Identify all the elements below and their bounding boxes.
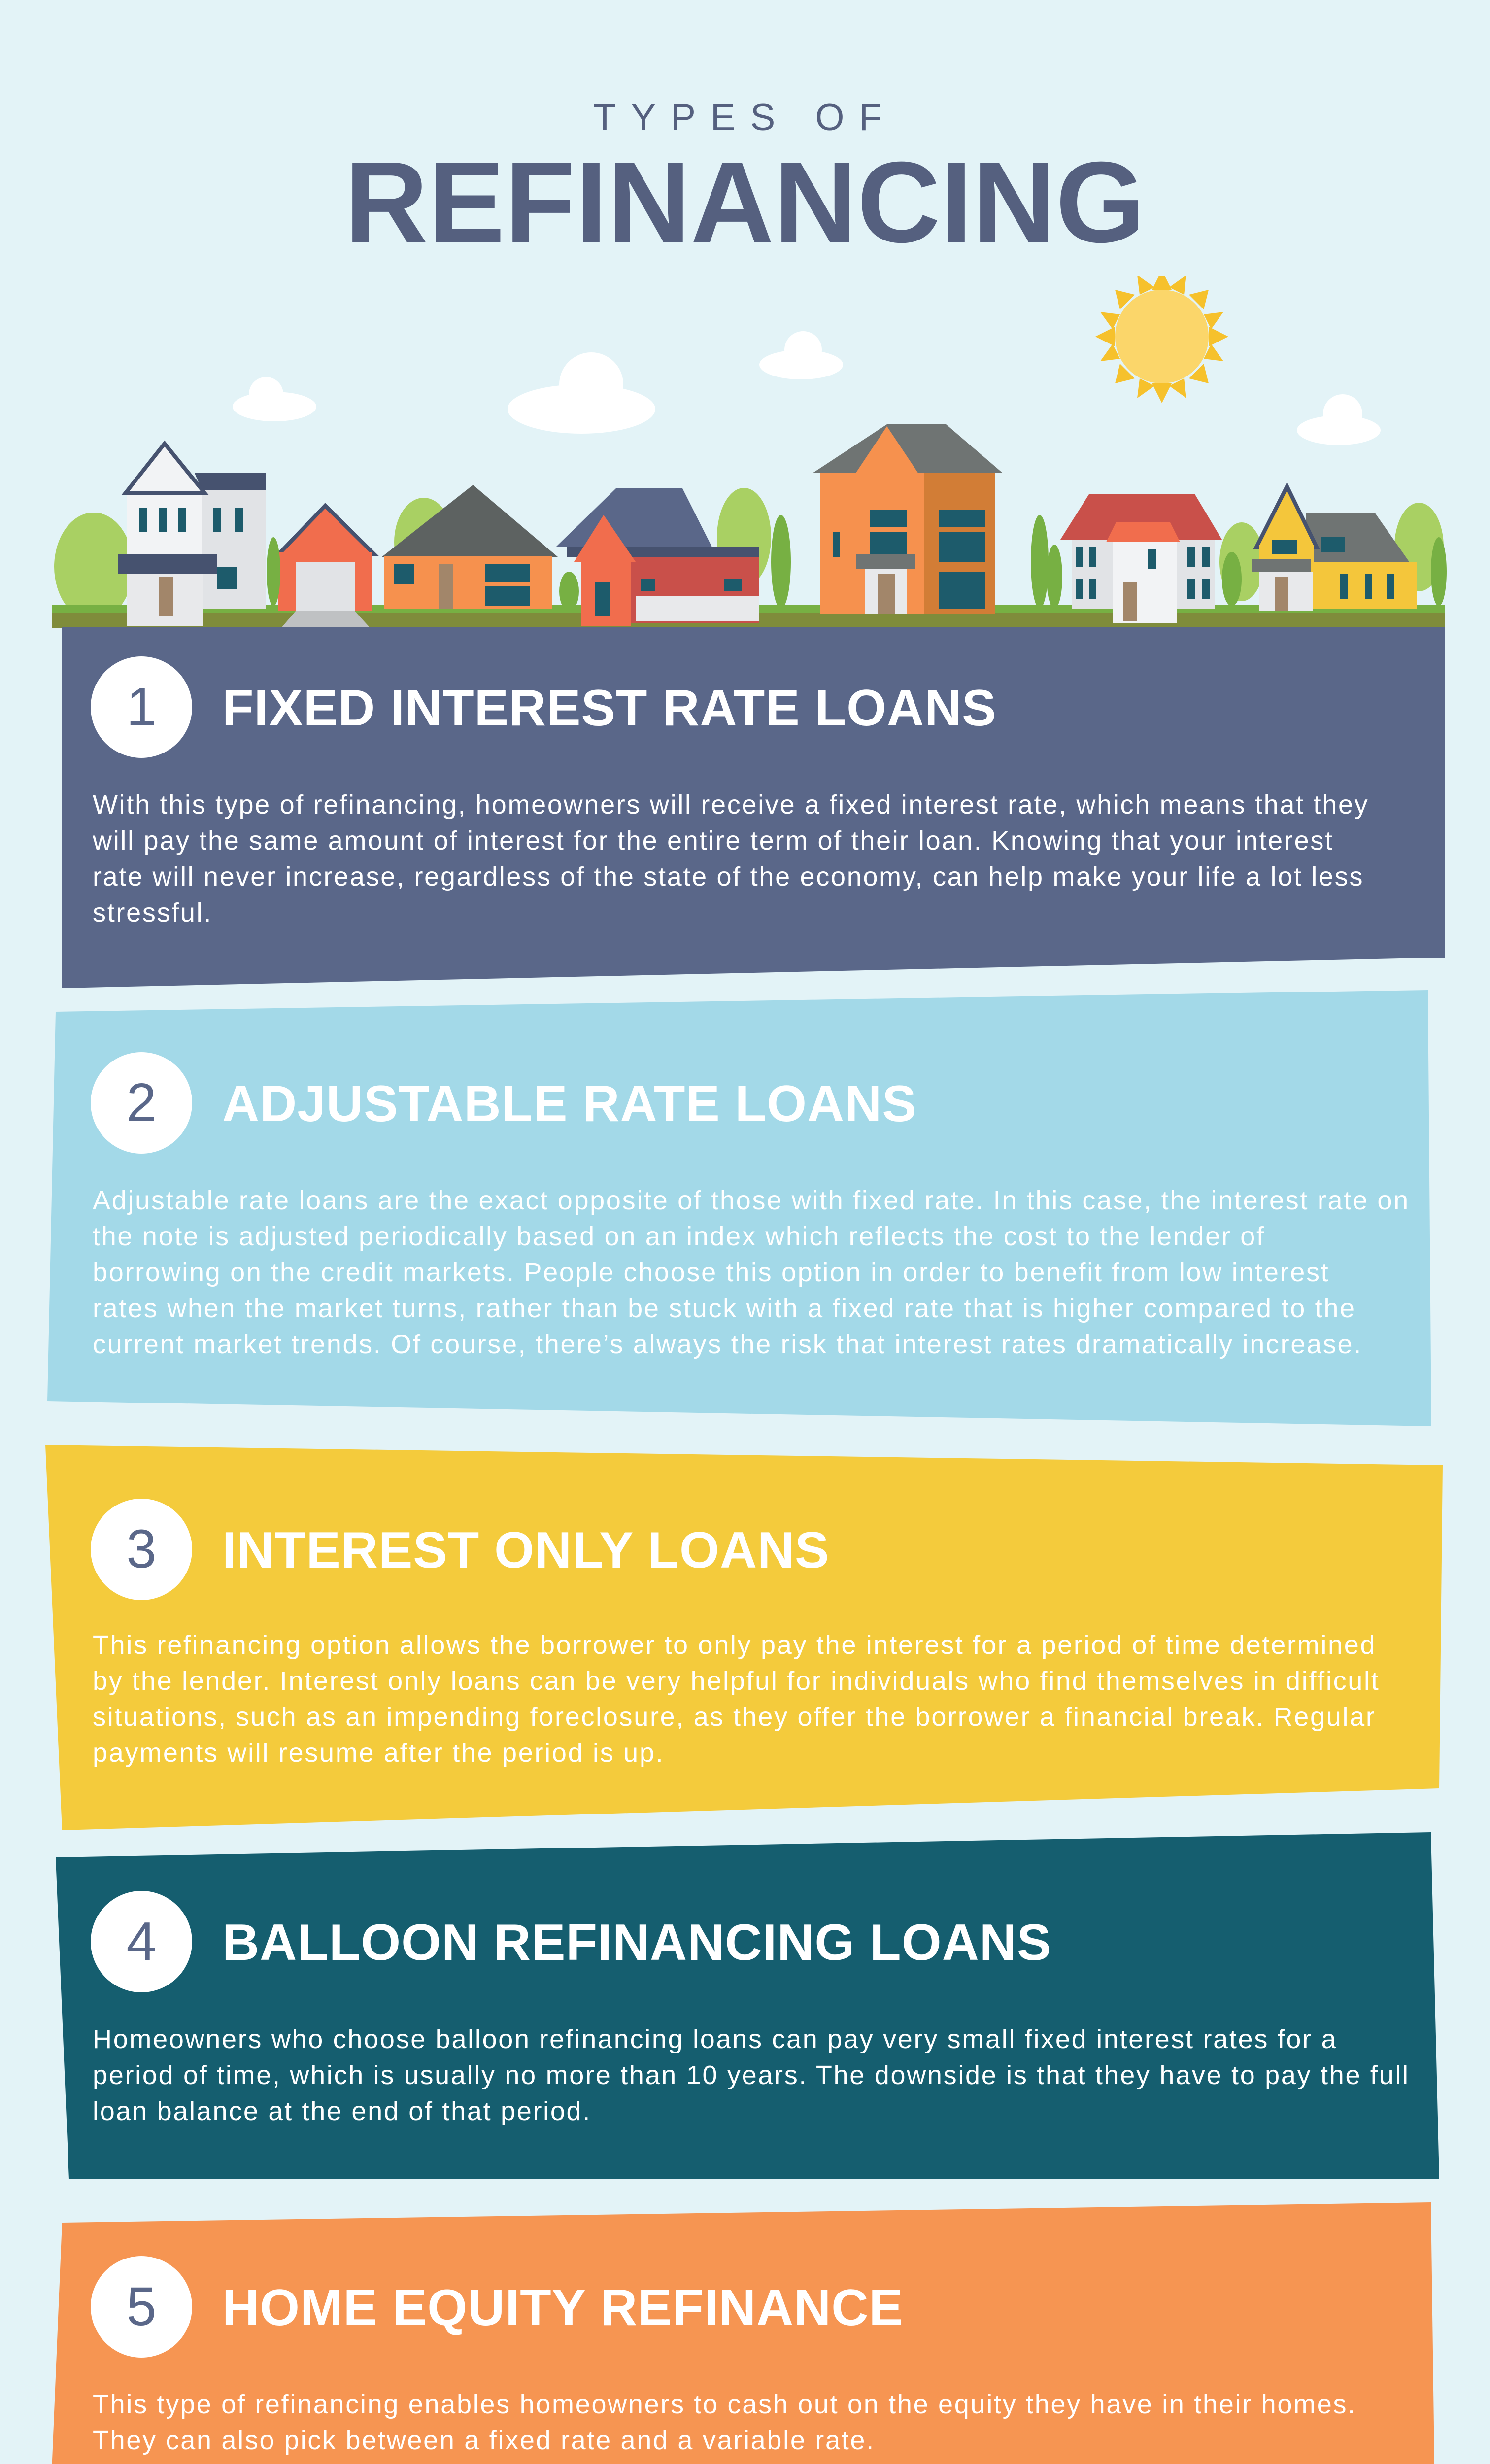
body 1: With this type of refinancing, homeowners will receive a fixed interest rate, which means that they — [93, 790, 1369, 820]
number circle 2 — [91, 1052, 192, 1154]
number circle 5 — [91, 2256, 192, 2358]
body 4 — [93, 2024, 1410, 2126]
number circle 3: 3 — [126, 1519, 157, 1579]
body 4: loan balance at the end of that period. — [93, 2096, 591, 2126]
number circle 2: 2 — [126, 1072, 157, 1133]
title 2: ADJUSTABLE RATE LOANS — [222, 1075, 917, 1132]
title 5: HOME EQUITY REFINANCE — [222, 2279, 904, 2336]
body 2: current market trends. Of course, there’s always the risk that interest rates dramatically increase. — [93, 1330, 1362, 1359]
house 7 yellow — [1252, 486, 1417, 611]
body 5 — [93, 2390, 1356, 2455]
panel 5: home equity refinance — [52, 2202, 1434, 2464]
number circle 4: 4 — [126, 1911, 157, 1972]
house 6 red roof — [1060, 494, 1222, 623]
body 1: stressful. — [93, 898, 212, 927]
icon: sun — [1095, 270, 1228, 403]
number circle 5: 5 — [126, 2276, 157, 2337]
ground — [52, 605, 1445, 613]
body 1 — [93, 790, 1369, 927]
number circle 3 — [91, 1499, 192, 1600]
title 3: INTEREST ONLY LOANS — [222, 1522, 830, 1579]
body 3: payments will resume after the period is up. — [93, 1738, 664, 1768]
panel 4: balloon refinancing loans — [56, 1832, 1439, 2179]
icon: clouds — [233, 331, 1381, 445]
number circle 4 — [91, 1891, 192, 1992]
body 2: rates when the market turns, rather than be stuck with a fixed rate that is higher compared to the — [93, 1294, 1356, 1323]
heading: refinancing: REFINANCING — [345, 137, 1145, 267]
body 1: rate will never increase, regardless of the state of the economy, can help make your life a lot less — [93, 862, 1364, 891]
body 5: This type of refinancing enables homeowners to cash out on the equity they have in their homes. — [93, 2390, 1356, 2419]
house 2 garage — [278, 506, 374, 628]
title 4: BALLOON REFINANCING LOANS — [222, 1914, 1051, 1971]
illustration: houses scene — [52, 276, 1447, 628]
body 5: They can also pick between a fixed rate and a variable rate. — [93, 2426, 875, 2455]
body 4: Homeowners who choose balloon refinancing loans can pay very small fixed interest rates for a — [93, 2024, 1337, 2054]
number circle 1: 1 — [126, 677, 157, 737]
title 1: FIXED INTEREST RATE LOANS — [222, 680, 997, 737]
number circle 1 — [91, 656, 192, 758]
body 3 — [93, 1630, 1380, 1768]
panel 3: interest only loans — [45, 1445, 1443, 1830]
house 1 white — [118, 444, 266, 626]
body 3: by the lender. Interest only loans can be very helpful for individuals who find themselves in difficult — [93, 1666, 1380, 1696]
body 3: This refinancing option allows the borrower to only pay the interest for a period of time determined — [93, 1630, 1376, 1660]
body 1: will pay the same amount of interest for the entire term of their loan. Knowing that your interest — [93, 826, 1334, 856]
trees — [267, 515, 1447, 611]
panel 2: adjustable rate loans — [47, 990, 1431, 1426]
body 2: borrowing on the credit markets. People choose this option in order to benefit from low interest — [93, 1258, 1329, 1287]
house 5 tall orange — [813, 424, 1003, 614]
body 3: situations, such as an impending foreclosure, as they offer the borrower a financial break. Regular — [93, 1702, 1376, 1732]
body 4: period of time, which is usually no more than 10 years. The downside is that they have to pay the full — [93, 2060, 1410, 2090]
body 2: the note is adjusted periodically based on an index which reflects the cost to the lender of — [93, 1222, 1265, 1251]
house 3 gray roof — [382, 485, 558, 609]
heading: types of: TYPES OF — [593, 97, 897, 138]
body 2 — [93, 1186, 1410, 1359]
bushes — [54, 488, 1444, 621]
body 2: Adjustable rate loans are the exact opposite of those with fixed rate. In this case, the interest rate on — [93, 1186, 1410, 1215]
house 4 blue roof — [556, 488, 759, 626]
panel 1: fixed interest rate loans — [62, 627, 1445, 988]
